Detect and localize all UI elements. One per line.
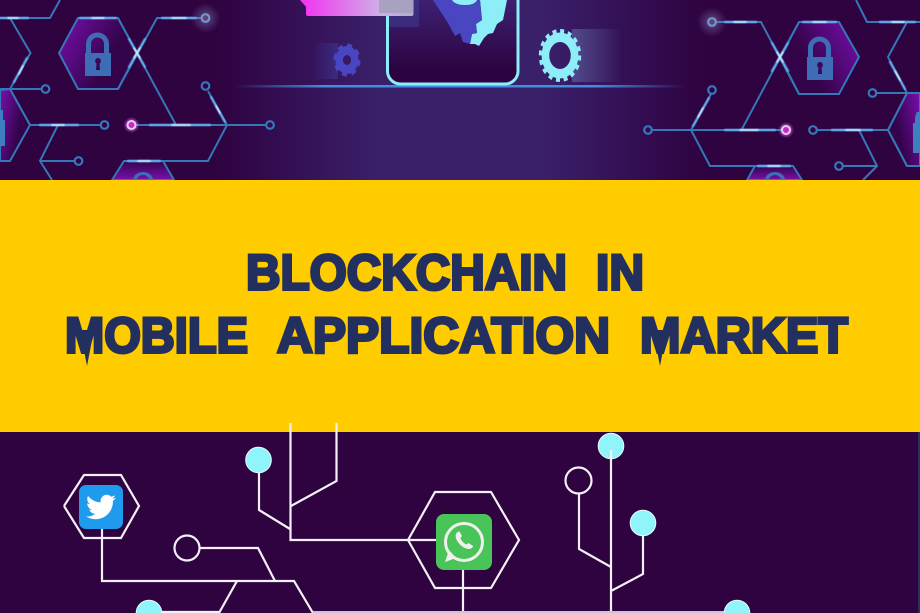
title: Blockchain in Mobile Application Market: MOBILE	[65, 308, 248, 364]
line over cyan node	[610, 450, 612, 460]
circuit: right network	[644, 0, 920, 180]
icon: right lock	[807, 36, 833, 80]
icon: twitter	[79, 485, 123, 529]
icon: small purple gear	[312, 43, 359, 79]
horizon line	[235, 85, 685, 88]
node: top left halo	[190, 3, 220, 33]
panel: yellow title band	[0, 180, 920, 432]
icon: left lock	[85, 32, 111, 76]
circuit: bright highlights	[8, 18, 904, 166]
nodes: cyan circles	[136, 433, 750, 613]
icon: left edge lock	[0, 110, 5, 146]
divider: bottom baseline	[313, 611, 737, 613]
node: right pink	[778, 122, 794, 138]
icon: pink card	[300, 0, 414, 16]
panel: bottom network background	[0, 423, 920, 613]
title: Blockchain in Mobile Application Market: MARKET	[640, 308, 848, 364]
circuit: left network	[0, 0, 274, 180]
circuit: bottom white lines	[64, 423, 643, 613]
node: top right halo	[697, 7, 727, 37]
node: left pink	[124, 117, 140, 133]
icon: isometric gear in phone	[433, 0, 507, 46]
circuit: soft blue glow	[0, 18, 915, 166]
nodes: hollow circles	[174, 468, 592, 560]
icon: cyan gear	[540, 29, 622, 82]
panel: top circuit background	[0, 0, 920, 180]
title: Blockchain in Mobile Application Market: IN	[596, 244, 644, 300]
icon: right edge lock	[913, 112, 920, 153]
icon: bottom left lock top	[133, 172, 153, 180]
title: Blockchain in Mobile Application Market: APPLICATION	[277, 308, 610, 364]
title: Blockchain in Mobile Application Market	[65, 244, 848, 366]
icon: mobile phone	[388, 0, 518, 84]
icon: whatsapp	[436, 514, 492, 570]
icon: bottom right lock top	[765, 172, 785, 180]
title: Blockchain in Mobile Application Market: BLOCKCHAIN	[246, 244, 567, 300]
